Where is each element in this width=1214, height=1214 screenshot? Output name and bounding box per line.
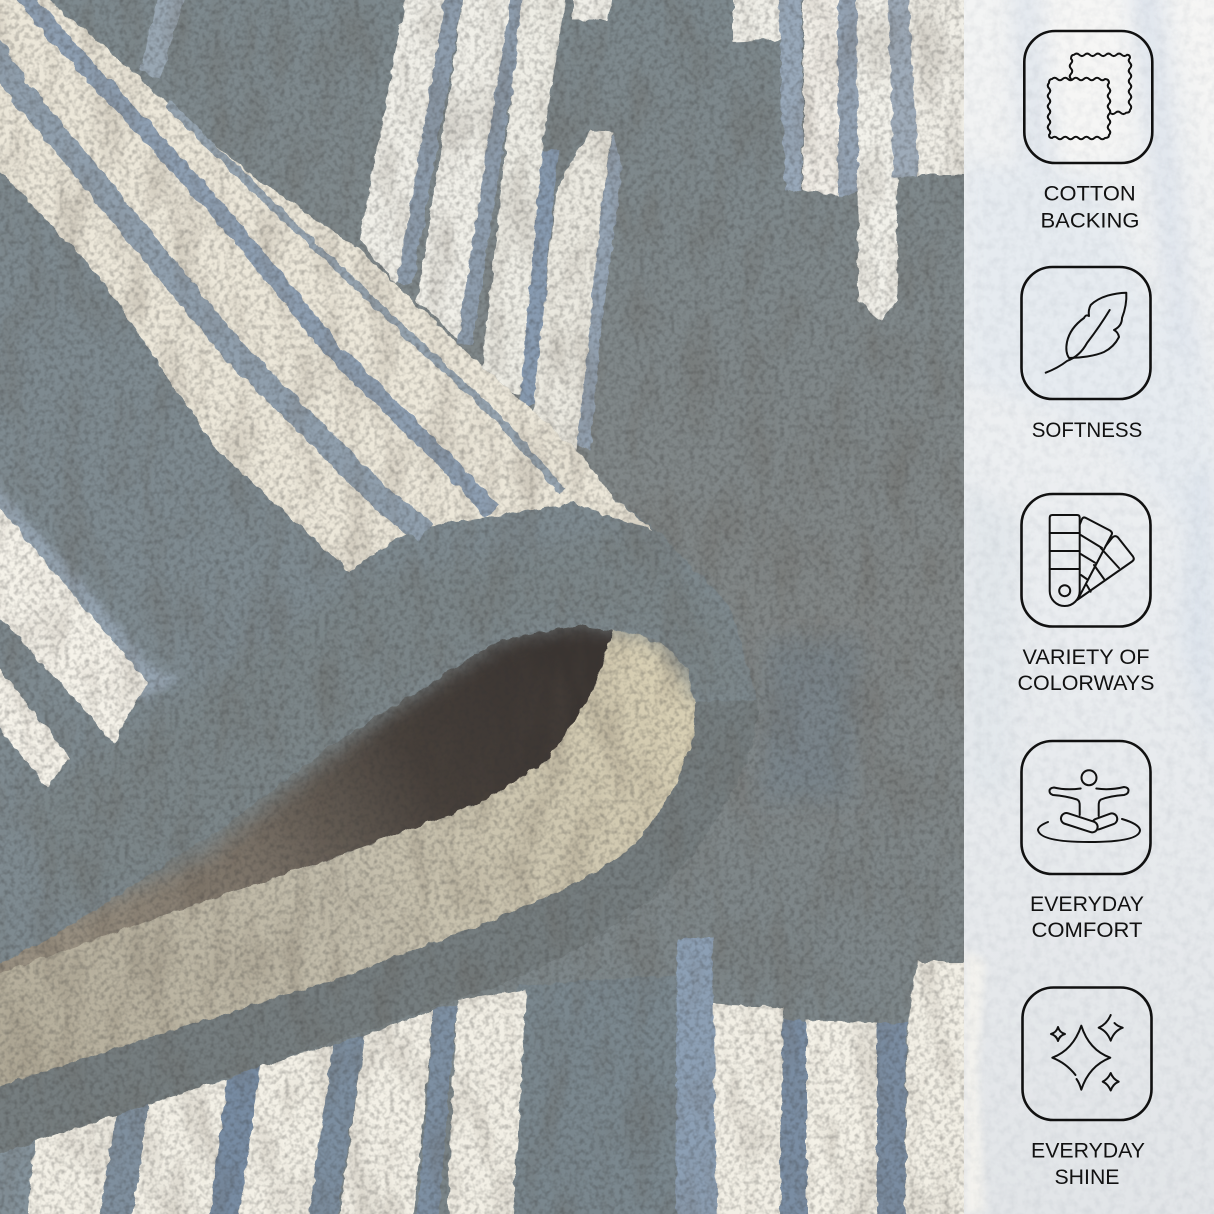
icon: feather xyxy=(1022,267,1150,399)
side panel xyxy=(964,0,1214,1214)
label: everyday shine: EVERYDAY xyxy=(1031,1139,1145,1163)
label: variety of colorways: COLORWAYS xyxy=(1018,671,1154,695)
label: softness: SOFTNESS xyxy=(1032,418,1142,442)
flat rug upper stripes xyxy=(360,0,975,455)
icon: meditating figure xyxy=(1022,741,1150,874)
label: cotton backing: BACKING xyxy=(1040,209,1140,233)
icon: colour fan deck xyxy=(1022,494,1150,626)
icon: cotton swatches xyxy=(1024,31,1152,163)
feature: variety of colorways xyxy=(1018,494,1154,695)
rolled rug top surface xyxy=(0,0,757,975)
feature: softness xyxy=(1022,267,1150,442)
label: everyday comfort: COMFORT xyxy=(1032,918,1142,942)
wool mottling xyxy=(0,0,964,1214)
cotton backing lining xyxy=(0,630,695,1092)
dark backing interior xyxy=(0,625,613,980)
feature: everyday shine xyxy=(1022,988,1152,1189)
cream stripes on roll xyxy=(0,0,653,572)
wool grain texture xyxy=(0,0,964,1214)
icon: sparkles xyxy=(1022,988,1152,1120)
label: variety of colorways: VARIETY OF xyxy=(1022,645,1150,669)
flat rug lower stripes xyxy=(0,938,975,1214)
label: everyday comfort: EVERYDAY xyxy=(1030,892,1144,916)
feature: cotton backing xyxy=(1024,31,1152,233)
rug lower fold band xyxy=(0,690,757,1160)
feature: everyday comfort xyxy=(1022,741,1150,942)
label: everyday shine: SHINE xyxy=(1054,1165,1120,1189)
blue stripes on roll xyxy=(167,103,563,492)
label: cotton backing: COTTON xyxy=(1044,182,1136,206)
